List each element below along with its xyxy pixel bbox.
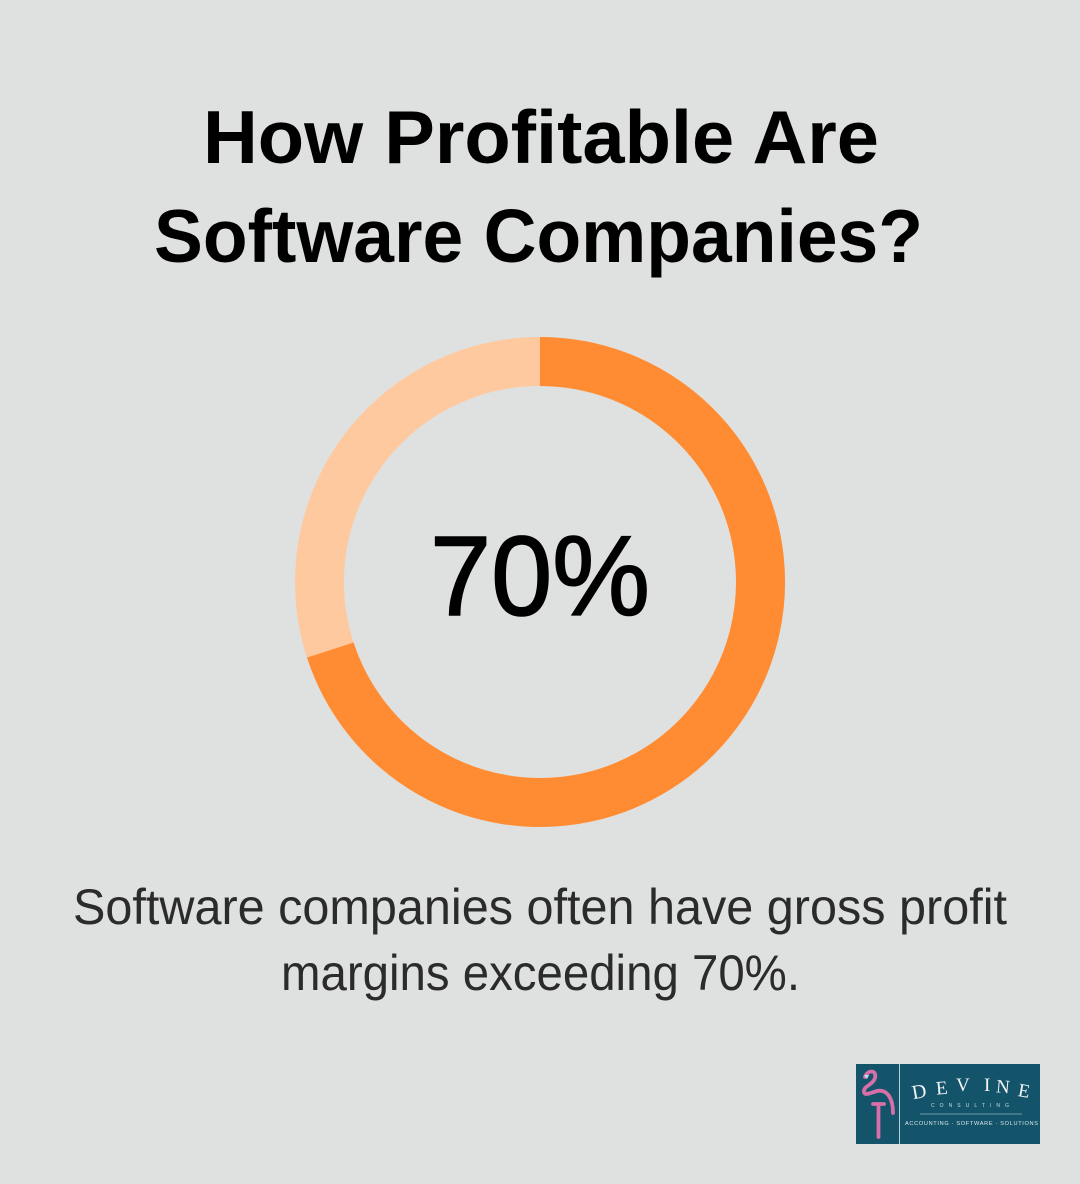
title (154, 95, 923, 278)
icon: flamingo (864, 1072, 893, 1137)
description text (73, 879, 1007, 1001)
logo: Devine Consulting: CONSULTING (931, 1103, 1009, 1109)
logo: Devine Consulting: ACCOUNTING · SOFTWARE · SOLUTIONS (905, 1121, 1038, 1127)
logo wordmark (910, 1075, 1031, 1104)
donut chart: 70% (320, 362, 761, 802)
description text: margins exceeding 70%. (281, 945, 800, 1001)
logo wordmark: N (995, 1076, 1011, 1098)
logo: Devine Consulting (856, 1064, 1040, 1144)
logo wordmark: V (956, 1075, 970, 1096)
logo wordmark: D (910, 1080, 928, 1104)
logo wordmark: E (1016, 1080, 1031, 1103)
logo wordmark: E (935, 1078, 949, 1100)
logo wordmark: I (984, 1075, 990, 1096)
title: How Profitable Are (203, 95, 879, 179)
title: Software Companies? (154, 194, 923, 278)
description text: Software companies often have gross profit (73, 879, 1007, 935)
donut value: 70% (430, 513, 650, 639)
